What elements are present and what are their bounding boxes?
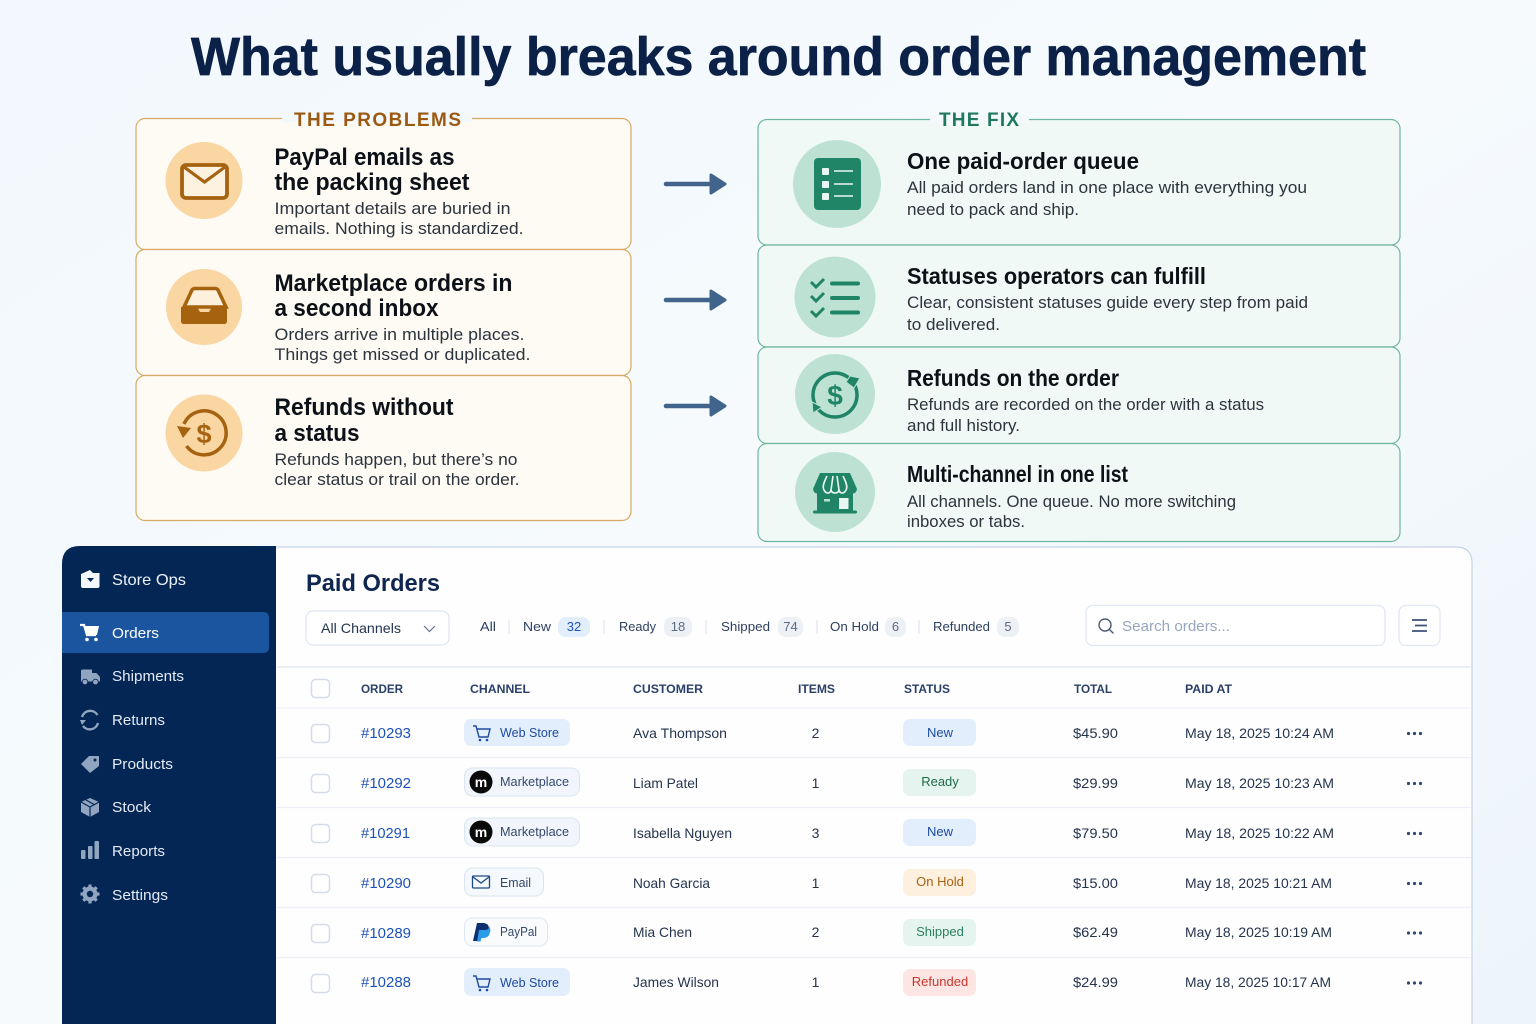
fix 1 text: All paid orders land in one place with everything you: [907, 178, 1307, 197]
icon: list document: [793, 140, 881, 228]
problem 3 text: clear status or trail on the order.: [274, 470, 520, 489]
nav item: stock: Stock: [112, 799, 152, 816]
status filter tabs: Shipped: [721, 619, 770, 634]
row #10289: [312, 918, 1422, 946]
nav item: shipments: [81, 668, 184, 685]
table header: TOTAL: [1074, 682, 1112, 696]
status filter tabs: 32: [567, 619, 581, 634]
problem card: marketplace orders: [136, 250, 631, 376]
status: new: New: [927, 824, 954, 839]
title: What usually breaks around order management: [191, 27, 1366, 87]
nav item: reports: [81, 841, 165, 860]
channel pill: paypal: [464, 918, 548, 946]
status: on hold: [903, 869, 976, 896]
status filter tabs: 18: [671, 619, 685, 634]
fix 4 text: [907, 461, 1236, 531]
status: refunded: [903, 969, 976, 996]
row #10290: Noah Garcia: [633, 875, 710, 891]
status: refunded: Refunded: [912, 974, 968, 989]
fix 1 text: need to pack and ship.: [907, 200, 1079, 219]
row #10292: Liam Patel: [633, 775, 698, 791]
fix 4 text: inboxes or tabs.: [907, 512, 1025, 531]
arrow 1: [666, 175, 725, 193]
problem 3 text: a status: [274, 420, 360, 447]
dropdown: all channels: All Channels: [321, 620, 401, 636]
table header: [312, 680, 1233, 698]
fix 3 text: [907, 365, 1264, 435]
problem 3 text: [274, 394, 520, 489]
channel pill: web store: Web Store: [500, 975, 559, 990]
nav item: settings: [80, 884, 168, 904]
table header: PAID AT: [1185, 682, 1233, 696]
icon: checklist: [794, 256, 876, 338]
fix card: statuses: [758, 245, 1400, 347]
status filter tabs: New: [523, 619, 552, 634]
row #10290: 1: [812, 875, 820, 891]
status: ready: [903, 769, 976, 796]
search box: Search orders...: [1122, 618, 1230, 635]
nav item: shipments: Shipments: [112, 668, 184, 685]
problem 3 text: Refunds without: [274, 394, 454, 421]
channel pill: marketplace: Marketplace: [500, 824, 569, 839]
nav item: settings: Settings: [112, 887, 168, 904]
fix 1 text: One paid-order queue: [907, 148, 1139, 174]
problem 3 text: Refunds happen, but there’s no: [274, 450, 518, 469]
status: new: [903, 819, 976, 846]
row #10293: $45.90: [1073, 725, 1118, 741]
fix 1 text: [907, 148, 1307, 219]
dropdown: all channels: [306, 611, 449, 645]
status: new: [903, 719, 976, 746]
arrow 3: [666, 397, 725, 415]
status filter tabs: On Hold: [830, 619, 879, 634]
nav item: returns: [80, 711, 165, 729]
heading: the fix: THE FIX: [939, 110, 1019, 131]
nav item: reports: Reports: [112, 843, 165, 860]
row #10291: [312, 818, 1422, 846]
row #10288: May 18, 2025 10:17 AM: [1185, 974, 1331, 990]
row #10290: [312, 868, 1422, 896]
row #10293: Ava Thompson: [633, 725, 727, 741]
table header: CHANNEL: [470, 682, 530, 696]
row #10292: May 18, 2025 10:23 AM: [1185, 775, 1334, 791]
row #10288: #10288: [361, 975, 411, 991]
panel: main orders table: [262, 547, 1472, 1024]
problem 2 text: [274, 270, 530, 364]
icon: envelope: [166, 142, 242, 219]
status: shipped: [903, 919, 976, 946]
row #10289: 2: [812, 924, 820, 940]
row #10290: $15.00: [1073, 875, 1118, 891]
channel pill: marketplace: [464, 818, 580, 846]
status filter tabs: Refunded: [933, 619, 990, 634]
fix 2 text: to delivered.: [907, 315, 1000, 334]
problem 1 text: [274, 144, 524, 238]
fix card: one queue: [758, 115, 1400, 245]
fix card: refunds on the order: [758, 347, 1400, 444]
problem card: PayPal emails: [136, 114, 631, 250]
row #10291: 3: [812, 825, 820, 841]
icon: inbox tray: [166, 269, 242, 345]
problem 2 text: Things get missed or duplicated.: [274, 345, 530, 364]
status: on hold: On Hold: [916, 874, 964, 889]
problem card: refunds without status: [136, 376, 631, 520]
search box: [1086, 606, 1385, 646]
table header: CUSTOMER: [633, 682, 703, 696]
fix 2 text: Clear, consistent statuses guide every step from paid: [907, 293, 1308, 312]
status: ready: Ready: [921, 774, 959, 789]
row #10291: $79.50: [1073, 825, 1118, 841]
fix 3 text: and full history.: [907, 416, 1020, 435]
row #10292: 1: [812, 775, 820, 791]
row #10290: May 18, 2025 10:21 AM: [1185, 875, 1332, 891]
row #10289: #10289: [361, 926, 411, 942]
fix card: multi-channel: [758, 444, 1400, 542]
row #10288: 1: [812, 974, 820, 990]
channel pill: web store: Web Store: [500, 725, 559, 740]
table header: ITEMS: [798, 682, 835, 696]
problem 1 text: the packing sheet: [274, 169, 470, 196]
row #10288: [312, 968, 1422, 996]
channel pill: marketplace: Marketplace: [500, 774, 569, 789]
fix 4 text: Multi-channel in one list: [907, 461, 1128, 487]
heading: paid orders: Paid Orders: [306, 570, 440, 597]
row #10291: #10291: [361, 826, 410, 842]
fix 3 text: Refunds are recorded on the order with a status: [907, 395, 1264, 414]
row #10292: #10292: [361, 776, 411, 792]
icon: dollar cycle: $: [827, 380, 843, 411]
status: new: New: [927, 725, 954, 740]
status filter tabs: [480, 617, 1019, 637]
fix 2 text: Statuses operators can fulfill: [907, 263, 1206, 289]
channel pill: marketplace: m: [475, 774, 487, 790]
table header: STATUS: [904, 682, 950, 696]
nav item: returns: Returns: [112, 712, 165, 729]
problem 1 text: emails. Nothing is standardized.: [274, 219, 524, 238]
status filter tabs: 5: [1004, 619, 1012, 634]
nav item: stock: [81, 798, 152, 817]
fix 4 text: All channels. One queue. No more switching: [907, 492, 1236, 511]
status filter tabs: 6: [892, 619, 899, 634]
row #10293: #10293: [361, 726, 411, 742]
nav item: orders (active): [62, 612, 269, 653]
brand: store ops: [81, 570, 186, 589]
problem 1 text: PayPal emails as: [274, 144, 454, 171]
brand: store ops: Store Ops: [112, 572, 186, 589]
problem 2 text: Orders arrive in multiple places.: [274, 325, 524, 344]
nav item: products: Products: [112, 756, 173, 773]
row #10292: [312, 768, 1422, 796]
icon: refund arrow: $: [196, 419, 212, 449]
row #10289: May 18, 2025 10:19 AM: [1185, 924, 1332, 940]
row #10293: 2: [812, 725, 820, 741]
icon: refund arrow: [166, 394, 242, 472]
icon: dollar cycle: [795, 354, 875, 434]
channel pill: web store: [464, 719, 570, 746]
channel pill: web store: [464, 968, 570, 996]
row #10293: [312, 719, 1422, 746]
channel pill: paypal: PayPal: [500, 924, 537, 939]
row #10290: #10290: [361, 876, 411, 892]
channel pill: email: [464, 868, 544, 896]
fix 3 text: Refunds on the order: [907, 365, 1119, 391]
status filter tabs: 74: [783, 619, 798, 634]
problem 2 text: Marketplace orders in: [274, 270, 512, 297]
table header: ORDER: [361, 682, 403, 696]
status: shipped: Shipped: [916, 924, 964, 939]
row #10289: Mia Chen: [633, 924, 692, 940]
heading: the problems: THE PROBLEMS: [294, 110, 461, 131]
row #10291: Isabella Nguyen: [633, 825, 732, 841]
panel: the fix: [758, 110, 1400, 542]
row #10288: $24.99: [1073, 974, 1118, 990]
sidebar: [62, 546, 276, 1024]
fix 2 text: [907, 263, 1308, 334]
status filter tabs: Ready: [619, 619, 656, 634]
nav item: products: [81, 756, 173, 773]
row #10289: $62.49: [1073, 924, 1118, 940]
panel: the problems: [136, 110, 631, 520]
filter button: [1399, 606, 1440, 646]
channel pill: email: Email: [500, 875, 531, 890]
row #10293: May 18, 2025 10:24 AM: [1185, 725, 1334, 741]
row #10291: May 18, 2025 10:22 AM: [1185, 825, 1334, 841]
row #10292: $29.99: [1073, 775, 1118, 791]
problem 2 text: a second inbox: [274, 295, 439, 322]
problem 1 text: Important details are buried in: [274, 199, 510, 218]
icon: storefront: [795, 452, 875, 532]
row #10288: James Wilson: [633, 974, 719, 990]
channel pill: marketplace: m: [475, 824, 487, 840]
channel pill: marketplace: [464, 768, 580, 796]
nav item: orders (active): Orders: [112, 625, 159, 642]
arrow 2: [666, 291, 725, 309]
status filter tabs: All: [480, 619, 496, 634]
